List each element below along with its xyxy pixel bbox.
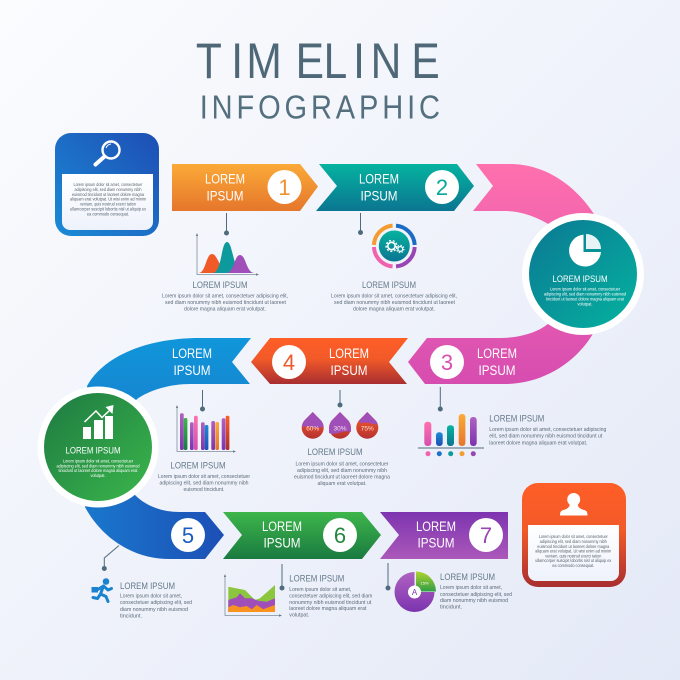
teal circle panel: adipiscing elit, sed diam nonummy nibh euismod bbox=[544, 292, 627, 296]
block 8: donut chart and text: LOREM IPSUM bbox=[440, 572, 495, 582]
block 6: runner and text: consectetuer adipiscing elit, sed bbox=[120, 600, 192, 606]
card text: aliquam erat volutpat. Ut wisi enim ad minim bbox=[70, 196, 146, 202]
arrow step 4 bbox=[251, 338, 408, 384]
grouped bar chart bbox=[176, 405, 236, 453]
block 5: grouped bar chart and text: Lorem ipsum dolor sit amet, consectetuer bbox=[158, 474, 250, 480]
ribbon: pink curve (step 3) bbox=[408, 164, 600, 384]
block 4: percent drops and text: Lorem ipsum dolor sit amet, consectetuer bbox=[296, 462, 389, 468]
arrow step 7: LOREM bbox=[416, 519, 456, 534]
card text: veniam, quis nostrud exerci tation bbox=[545, 554, 602, 558]
teal circle panel bbox=[522, 213, 644, 335]
card text: euismod tincidunt ut laoreet dolore magna bbox=[537, 544, 610, 549]
teal circle panel: LOREM IPSUM bbox=[552, 274, 608, 284]
block 4: percent drops and text: LOREM IPSUM bbox=[308, 447, 362, 457]
block 2: gear ring icon and text bbox=[331, 213, 457, 312]
icon: pie chart bbox=[569, 234, 601, 267]
arrow step 4: LOREM bbox=[329, 346, 369, 361]
arrow step 4: 4 bbox=[283, 350, 295, 375]
block 1: bell curve chart and text: LOREM IPSUM bbox=[192, 280, 248, 290]
green circle panel: LOREM IPSUM bbox=[66, 446, 120, 456]
block 8: donut chart and text: tincidunt. bbox=[440, 604, 462, 610]
green circle panel: Lorem ipsum dolor sit amet, consectetuer bbox=[63, 458, 134, 464]
drop 30%: 30% bbox=[333, 426, 347, 432]
block 7: area chart and text: Lorem ipsum dolor sit amet, bbox=[289, 587, 352, 593]
card text: Lorem ipsum dolor sit amet, consectetuer bbox=[539, 534, 608, 539]
arrow step 2: 2 bbox=[436, 175, 448, 200]
block 7: area chart and text: laoreet dolore magna aliquam erat bbox=[289, 606, 367, 612]
arrow step 1: 1 bbox=[278, 175, 291, 200]
block 2: gear ring icon and text: dolore magna aliquam erat volutpat. bbox=[353, 306, 435, 312]
card text bbox=[528, 525, 619, 581]
block 4: percent drops and text: adipiscing elit, sed diam nonummy nibh bbox=[297, 468, 387, 474]
icon: gears ring bbox=[374, 226, 415, 266]
card text: Lorem ipsum dolor sit amet, consectetuer bbox=[74, 182, 143, 187]
teal circle panel: tincidunt ut laoreet dolore magna aliquam erat bbox=[546, 296, 625, 302]
card text: ea commodo consequat. bbox=[552, 563, 594, 568]
block 8: donut chart and text: diam nonummy nibh euismod bbox=[440, 598, 508, 604]
block 5: grouped bar chart and text: adipiscing elit, sed diam nonummy nibh bbox=[160, 480, 248, 486]
arrow step 2: LOREM bbox=[359, 172, 399, 186]
title: TIMELINE bbox=[196, 33, 440, 89]
card text: ullamcorper suscipit lobortis nisl ut aliquip ex bbox=[535, 558, 612, 563]
block 1: bell curve chart and text bbox=[162, 213, 288, 312]
donut chart: 15% bbox=[420, 580, 429, 586]
step 3 number bbox=[430, 345, 464, 379]
ribbon: blue curve top (start of step): IPSUM bbox=[174, 363, 210, 378]
ribbon: blue curve bottom (step 5) bbox=[85, 447, 224, 559]
green circle panel: adipiscing elit, sed diam nonummy nibh euismod bbox=[56, 463, 140, 468]
donut chart bbox=[394, 572, 436, 612]
card text: veniam, quis nostrud exerci tation bbox=[80, 202, 137, 206]
icon: runner bbox=[92, 578, 112, 602]
block 7: area chart and text: LOREM IPSUM bbox=[289, 574, 344, 584]
profile card bbox=[522, 483, 626, 587]
block 2: gear ring icon and text: Lorem ipsum dolor sit amet, consectetuer adipiscing elit, bbox=[331, 294, 457, 300]
arrow step 7 bbox=[380, 512, 508, 559]
block 6: runner and text: LOREM IPSUM bbox=[120, 581, 175, 591]
block 7: area chart and text: consectetuer adipiscing elit, sed diam bbox=[289, 594, 373, 600]
arrow step 6: LOREM bbox=[262, 519, 302, 534]
green circle panel: volutpat. bbox=[90, 473, 106, 478]
arrow step 4: IPSUM bbox=[330, 363, 368, 378]
ribbon: pink curve (step 3): IPSUM bbox=[478, 363, 516, 378]
icon: person bbox=[560, 493, 588, 516]
block 1: bell curve chart and text: sed diam nonummy nibh euismod tincidunt ut laoreet bbox=[165, 300, 286, 306]
green circle panel bbox=[38, 386, 158, 508]
block 5: grouped bar chart and text bbox=[158, 390, 250, 493]
block 8: donut chart and text bbox=[386, 563, 512, 612]
area chart bbox=[224, 574, 282, 617]
block 3: column chart and text: laoreet dolore magna aliquam erat volutpat. bbox=[489, 440, 587, 446]
ribbon: blue curve top (start of step) bbox=[87, 338, 251, 447]
card text: euismod tincidunt ut laoreet dolore magna bbox=[72, 192, 145, 197]
card text bbox=[62, 174, 153, 230]
arrow step 1: LOREM bbox=[205, 172, 245, 186]
arrow step 1 bbox=[172, 164, 318, 211]
title bbox=[196, 33, 440, 126]
ribbon: blue curve top (start of step): LOREM bbox=[172, 346, 212, 361]
donut chart: A bbox=[412, 588, 418, 597]
drop 60%: 60% bbox=[306, 426, 319, 432]
block 1: bell curve chart and text: Lorem ipsum dolor sit amet, consectetuer adipiscing elit, bbox=[162, 294, 288, 300]
block 6: runner and text: Lorem ipsum dolor sit amet, bbox=[120, 594, 182, 600]
arrow step 6: 6 bbox=[334, 523, 346, 548]
arrow step 1: IPSUM bbox=[206, 188, 244, 204]
green circle panel: tincidunt ut laoreet dolore magna aliquam erat bbox=[58, 468, 138, 473]
block 3: column chart and text: LOREM IPSUM bbox=[489, 414, 544, 424]
block 5: grouped bar chart and text: euismod tincidunt. bbox=[184, 487, 224, 493]
block 5: grouped bar chart and text: LOREM IPSUM bbox=[170, 461, 226, 471]
block 7: area chart and text: volutpat. bbox=[289, 612, 309, 618]
block 4: percent drops and text: euismod tincidunt ut laoreet dolore magna bbox=[294, 474, 390, 480]
arrow step 7: IPSUM bbox=[418, 536, 454, 550]
block 2: gear ring icon and text: LOREM IPSUM bbox=[362, 280, 416, 290]
search card bbox=[55, 133, 159, 236]
card text: ullamcorper suscipit lobortis nisl ut aliquip ex bbox=[70, 206, 147, 212]
block 4: percent drops and text: aliquam erat volutpat. bbox=[318, 481, 366, 487]
card text: aliquam erat volutpat. Ut wisi enim ad minim bbox=[535, 548, 612, 554]
column chart bbox=[418, 414, 484, 456]
teal circle panel: Lorem ipsum dolor sit amet, consectetuer bbox=[550, 286, 621, 292]
title: INFOGRAPHIC bbox=[200, 89, 440, 126]
block 2: gear ring icon and text: sed diam nonummy nibh euismod tincidunt ut laoreet bbox=[334, 300, 455, 306]
bell curve chart bbox=[196, 233, 259, 276]
step 3 number: 3 bbox=[441, 350, 453, 375]
icon: magnifier bbox=[96, 142, 120, 164]
step 5 number: 5 bbox=[182, 523, 194, 548]
arrow step 2 bbox=[316, 164, 474, 211]
block 7: area chart and text bbox=[224, 564, 373, 618]
ribbon: pink curve (step 3): LOREM bbox=[477, 346, 517, 361]
icon: growth chart bbox=[83, 405, 114, 439]
block 6: runner and text: diam nonummy nibh euismod bbox=[120, 607, 188, 613]
block 4: percent drops and text bbox=[294, 390, 390, 487]
card text: adipiscing elit, sed diam nonummy nibh bbox=[540, 539, 607, 544]
block 3: column chart and text: elit, sed diam nonummy nibh euismod tincidunt ut bbox=[489, 434, 603, 440]
block 3: column chart and text: Lorem ipsum dolor sit amet, consectetuer adipiscing bbox=[489, 427, 606, 433]
drop 75%: 75% bbox=[361, 426, 374, 432]
card text: adipiscing elit, sed diam nonummy nibh bbox=[74, 187, 142, 192]
arrow step 6: IPSUM bbox=[264, 536, 300, 550]
block 8: donut chart and text: consectetuer adipiscing elit, sed bbox=[440, 592, 512, 598]
arrow step 2: IPSUM bbox=[360, 188, 398, 204]
block 7: area chart and text: nonummy nibh euismod tincidunt ut bbox=[289, 600, 372, 606]
block 1: bell curve chart and text: dolore magna aliquam erat volutpat. bbox=[184, 306, 266, 312]
teal circle panel: volutpat. bbox=[578, 302, 592, 306]
block 6: runner and text bbox=[92, 546, 192, 620]
block 6: runner and text: tincidunt. bbox=[120, 614, 142, 620]
arrow step 6 bbox=[223, 512, 381, 559]
card text: ea commodo consequat. bbox=[87, 212, 129, 216]
block 8: donut chart and text: Lorem ipsum dolor sit amet, bbox=[440, 585, 502, 591]
block 3: column chart and text bbox=[418, 387, 606, 456]
arrow step 7: 7 bbox=[480, 523, 492, 548]
